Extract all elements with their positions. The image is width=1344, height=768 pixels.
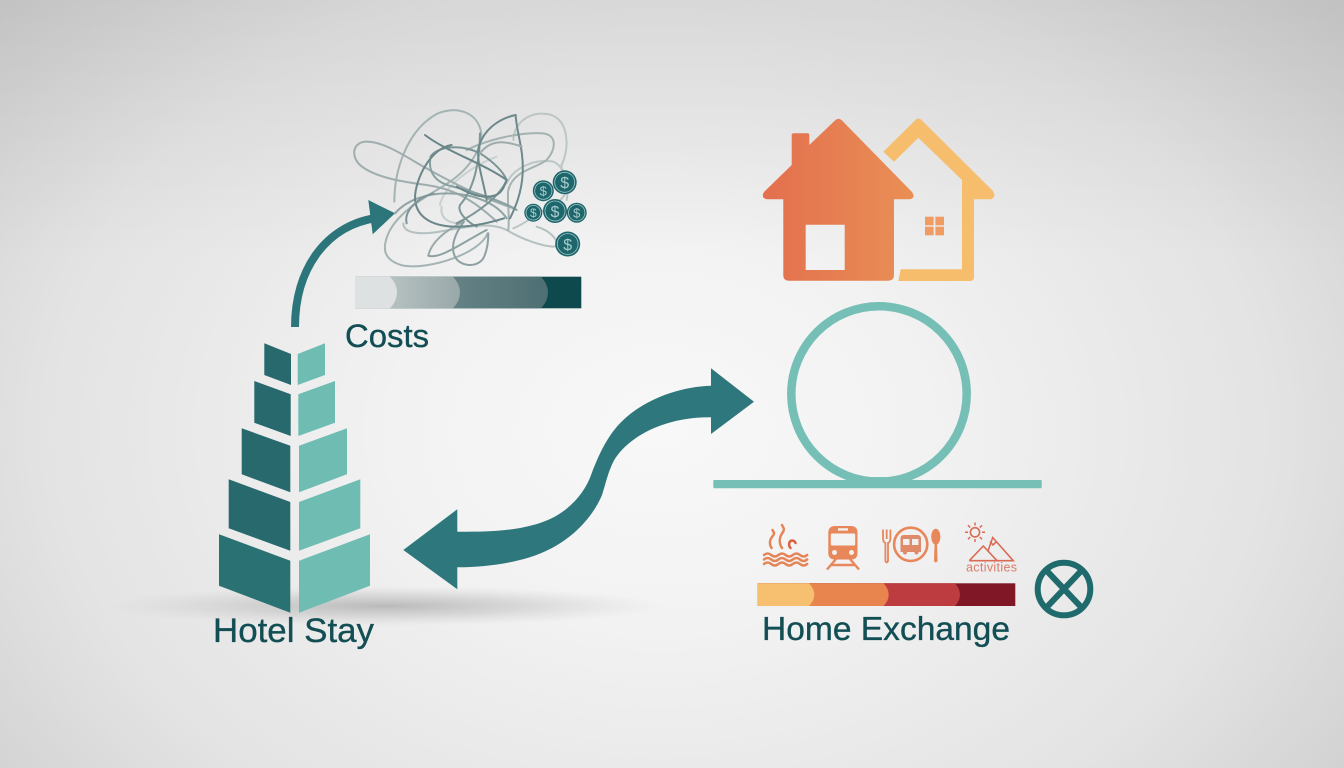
arrow: hotel to costs — [295, 200, 395, 327]
bar: home exchange scale — [758, 583, 1015, 606]
icon: coins: $ — [563, 237, 572, 254]
bar: costs scale — [355, 277, 581, 308]
icon: window — [925, 217, 944, 235]
ground shadow — [105, 586, 665, 626]
icon: coins: $ — [530, 206, 537, 220]
icon: sun and mountains — [965, 522, 1013, 561]
icon: plate — [894, 528, 927, 561]
icon: fork — [883, 530, 890, 562]
icon: coins: $ — [560, 175, 569, 192]
icon: hot spring — [764, 525, 807, 566]
scribble: tangled costs — [354, 110, 567, 266]
icon: circle on a line — [713, 306, 1042, 488]
icon: hotel tower — [219, 343, 370, 613]
icon: train — [827, 526, 859, 570]
label: activities: activities — [966, 560, 1017, 574]
icon: coins: $ — [573, 206, 581, 220]
icon: solid house — [763, 119, 914, 281]
heading: Home Exchange: Home Exchange — [762, 610, 1010, 647]
icon: spoon — [931, 529, 940, 562]
icon: coins: $ — [551, 204, 560, 221]
icon: coins — [524, 170, 587, 256]
icon: overlapping houses — [763, 118, 994, 281]
arrow: two-way exchange — [403, 368, 754, 589]
icon: crossed circle — [1038, 563, 1090, 615]
icon: outline house — [883, 118, 994, 281]
icon: meal plate with utensils — [883, 528, 940, 562]
heading: Costs: Costs — [345, 318, 429, 354]
icon: coins: $ — [540, 184, 548, 198]
heading: Hotel Stay: Hotel Stay — [213, 612, 374, 650]
icon: bus — [900, 535, 921, 552]
